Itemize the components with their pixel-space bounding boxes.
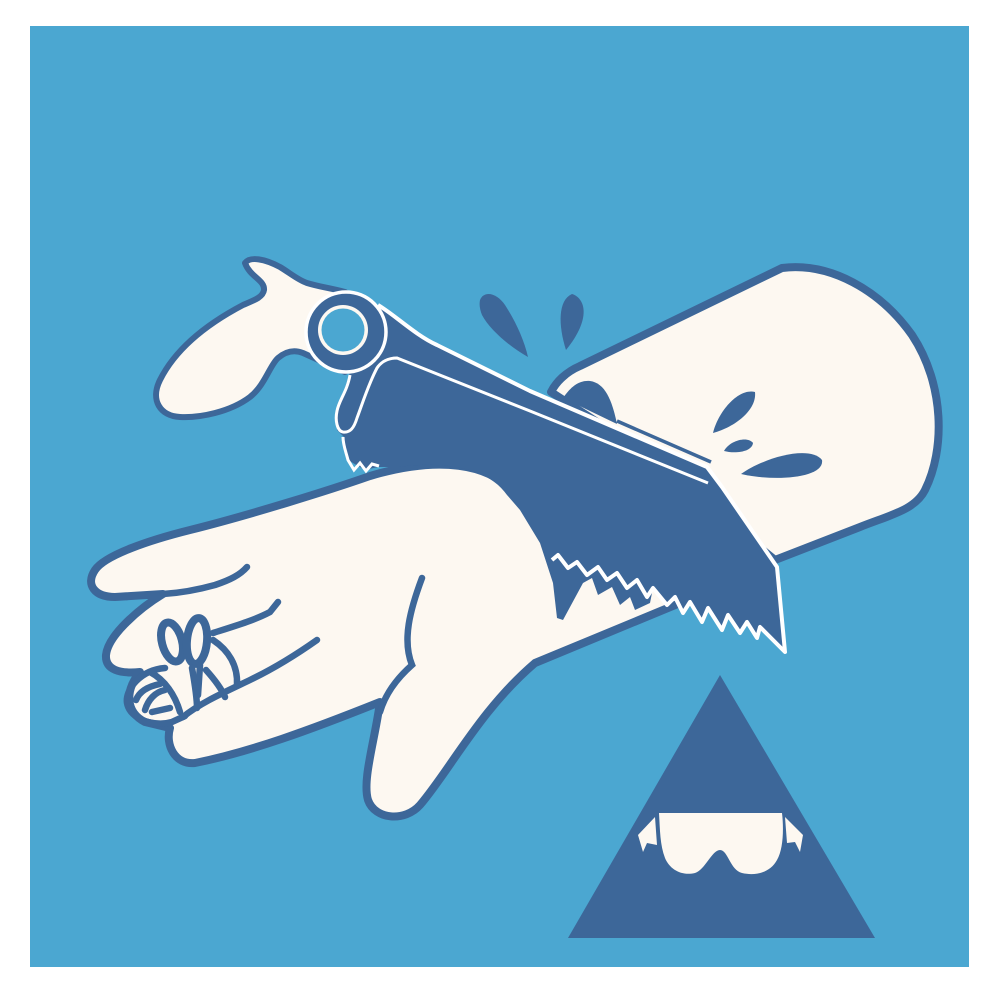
icon: main hand: [91, 465, 680, 816]
saw handle ring: [306, 292, 386, 372]
blade back dark edge on forearm: [617, 421, 711, 462]
saw inner edge highlight: [336, 358, 708, 483]
icon: warning triangle with goggles: [568, 675, 875, 938]
icon: safety goggles: [659, 813, 783, 874]
saw top edge highlight: [378, 305, 785, 652]
curled fingers: [127, 617, 237, 724]
saw heel teeth highlight: [343, 437, 379, 471]
icon: blood drops above saw: [480, 294, 584, 357]
finger creases: [163, 567, 317, 717]
saw blade: [337, 305, 785, 652]
icon: severed forearm: [551, 267, 939, 560]
goggle strap right: [785, 817, 803, 852]
goggle strap left: [638, 817, 657, 852]
thumb crease: [380, 578, 422, 712]
icon: saw: [306, 292, 785, 652]
icon: fingertip piece: [156, 259, 345, 417]
icon: wound and drops on forearm: [563, 381, 822, 478]
